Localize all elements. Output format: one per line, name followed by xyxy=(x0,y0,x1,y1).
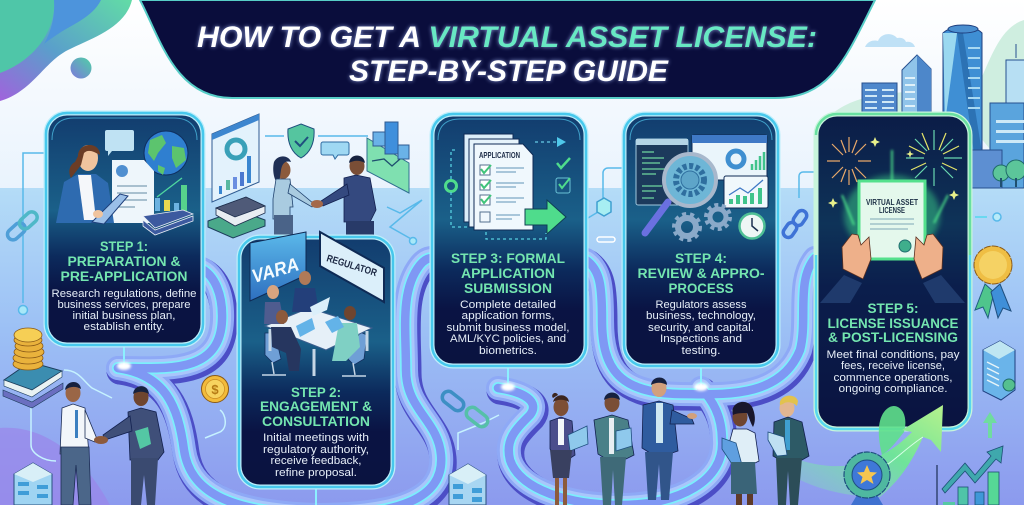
team group xyxy=(550,378,809,505)
glowing road network xyxy=(118,258,817,505)
icon: books xyxy=(208,197,265,238)
icon: speech bubble xyxy=(321,142,349,159)
icon: books stack xyxy=(3,362,63,408)
heading xyxy=(638,251,764,296)
person: man presenting xyxy=(642,378,697,500)
icon: clock xyxy=(740,214,764,238)
body text: establish entity. xyxy=(84,321,164,333)
icon: chain right xyxy=(781,209,809,239)
illustration: application xyxy=(446,134,570,239)
icon: chain centre xyxy=(440,389,490,429)
heading: STEP 2: xyxy=(291,385,341,400)
mini bar chart xyxy=(155,178,187,212)
icon: gold rosette xyxy=(974,246,1012,318)
city skyline xyxy=(862,25,1024,188)
REGULATOR screen: REGULATOR xyxy=(325,253,379,279)
icon: speech bubble xyxy=(105,130,134,156)
person: blond man with tablet xyxy=(768,396,809,505)
illustration: review xyxy=(636,135,768,240)
heading: LICENSE ISSUANCE xyxy=(828,316,958,331)
illustration: meeting xyxy=(250,232,384,376)
handshake xyxy=(94,436,108,444)
heading: STEP 3: FORMAL xyxy=(451,251,565,266)
chain link icons xyxy=(5,198,809,429)
heading: PROCESS xyxy=(668,281,734,296)
heading: STEP 1: xyxy=(100,239,148,254)
person: woman in white blouse xyxy=(722,402,759,505)
body text: Regulators assess xyxy=(656,299,747,311)
glow xyxy=(844,175,940,255)
arrow: submit xyxy=(525,200,566,234)
icon: chain left xyxy=(5,210,39,242)
icon: books xyxy=(143,210,193,235)
handshake xyxy=(311,200,323,208)
body text: Meet final conditions, pay xyxy=(826,349,960,361)
heading: ENGAGEMENT & xyxy=(260,399,372,414)
icon: chart cube xyxy=(367,122,409,193)
body text: application forms, xyxy=(462,310,554,322)
certificate xyxy=(859,181,925,259)
body text: Initial meetings with xyxy=(263,432,369,444)
VARA screen xyxy=(250,232,306,301)
heading xyxy=(260,385,372,429)
table xyxy=(265,308,372,350)
body text xyxy=(52,288,196,333)
body text: security, and capital. xyxy=(648,322,754,334)
icon: dollar coin xyxy=(202,376,228,402)
body text: commence operations, xyxy=(834,372,952,384)
icon: hexagon node xyxy=(597,198,611,216)
heading: SUBMISSION xyxy=(464,281,552,296)
heading: & POST-LICENSING xyxy=(828,330,958,345)
icon: shield xyxy=(288,124,314,158)
top centre scene: dashboard, shield and handshake xyxy=(208,114,409,238)
title text: STEP-BY-STEP GUIDE xyxy=(349,55,669,88)
arrow: small up arrow xyxy=(983,412,997,438)
thin circuit lines xyxy=(18,136,1001,461)
VARA screen: VARA xyxy=(250,254,302,288)
panel: step 5 xyxy=(816,114,970,429)
body text: submit business model, xyxy=(446,322,570,334)
cloud xyxy=(865,34,915,47)
illustration: preparation xyxy=(56,130,193,235)
panel: step 1 xyxy=(46,113,203,345)
heading: PRE-APPLICATION xyxy=(60,269,188,284)
body text: initial business plan, xyxy=(72,310,176,322)
fireworks xyxy=(827,130,962,186)
person: man shaking hands xyxy=(321,156,376,236)
body text: business, technology, xyxy=(646,310,756,322)
heading: CONSULTATION xyxy=(262,414,370,429)
icon: dollar coin: $ xyxy=(211,382,219,397)
icon: building with tree xyxy=(983,341,1015,400)
body text xyxy=(263,432,369,479)
hands xyxy=(820,234,965,303)
chart: growth bars xyxy=(937,446,1003,505)
chart window xyxy=(724,176,768,208)
icon: coin stack xyxy=(13,328,44,370)
person: woman with tablet xyxy=(550,393,588,505)
body text xyxy=(646,299,756,357)
body text: refine proposal. xyxy=(275,467,357,479)
icon: office building xyxy=(14,463,52,505)
heading xyxy=(451,251,565,296)
body text: fees, receive license, xyxy=(841,360,945,372)
sparkles xyxy=(828,137,959,208)
body text: Research regulations, define xyxy=(52,288,196,300)
heading: PREPARATION & xyxy=(68,254,181,269)
illustration: fireworks and licence xyxy=(820,130,965,303)
title text: HOW TO GET A VIRTUAL ASSET LICENSE: xyxy=(197,21,817,54)
decorative blob top-left xyxy=(0,0,132,101)
body text: receive feedback, xyxy=(270,455,362,467)
person: woman shaking hands xyxy=(273,156,314,236)
body text: Inspections and xyxy=(660,333,742,345)
connector nodes xyxy=(117,344,708,505)
heading xyxy=(60,239,188,284)
heading: REVIEW & APPRO- xyxy=(638,266,764,281)
seated people xyxy=(264,271,360,371)
code window xyxy=(636,139,688,205)
badge: star medal xyxy=(844,452,890,505)
left scene: coins, books, handshake xyxy=(3,328,228,505)
body text xyxy=(446,299,570,357)
title banner xyxy=(140,0,875,98)
person: man in white shirt xyxy=(60,382,97,505)
REGULATOR screen xyxy=(320,232,384,302)
icon: dashboard board xyxy=(212,114,259,202)
checklist xyxy=(480,165,524,222)
body text: biometrics. xyxy=(479,345,537,357)
body text: ongoing compliance. xyxy=(838,383,948,395)
person: woman with clipboard xyxy=(56,145,128,224)
panel: step 3 xyxy=(432,114,586,366)
body text: AML/KYC policies, and xyxy=(450,333,566,345)
heading: APPLICATION xyxy=(461,266,555,281)
panel: step 2 xyxy=(239,232,393,487)
illustration: application: APPLICATION xyxy=(479,150,520,160)
icon: globe xyxy=(144,131,188,175)
person: man with tablet xyxy=(594,392,634,505)
panel: step 4 xyxy=(624,114,778,366)
body text: Complete detailed xyxy=(460,299,556,311)
heading xyxy=(828,301,958,345)
icon: document xyxy=(112,160,154,223)
body text: testing. xyxy=(682,345,720,357)
gears xyxy=(674,205,730,240)
heading: STEP 5: xyxy=(868,301,918,316)
dashboard window xyxy=(692,135,767,180)
person: man in navy suit xyxy=(103,386,164,505)
body text: regulatory authority, xyxy=(263,444,369,456)
icon: building bottom centre xyxy=(449,464,486,505)
magnifying glass xyxy=(645,154,716,233)
chairs xyxy=(262,332,367,376)
title text xyxy=(197,21,817,88)
arrow: growth swoosh xyxy=(800,405,943,497)
checks and dashes xyxy=(446,137,570,239)
body text: business services, prepare xyxy=(58,299,190,311)
certificate: VIRTUAL ASSET xyxy=(866,198,918,207)
body text xyxy=(826,349,960,395)
certificate: LICENSE xyxy=(879,206,905,215)
heading: STEP 4: xyxy=(675,251,727,266)
